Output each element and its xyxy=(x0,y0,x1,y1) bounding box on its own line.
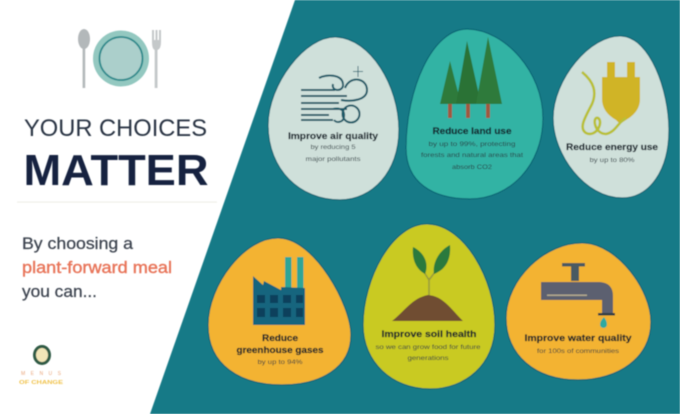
text: reduce land use: absorb CO2 xyxy=(452,165,493,171)
text: improve water quality xyxy=(524,333,632,355)
icon: wind xyxy=(301,66,367,122)
panel: greenhouse gases xyxy=(208,238,351,385)
text: reduce greenhouse gases: Reduce xyxy=(262,333,298,343)
text: improve soil health xyxy=(376,329,481,362)
intro text xyxy=(22,235,172,301)
panel: land use xyxy=(406,29,543,199)
text: improve water quality: for 100s of communities xyxy=(537,349,619,355)
panel: air quality xyxy=(268,37,399,200)
logo: MENUS xyxy=(21,371,62,377)
text: improve air quality: major pollutants xyxy=(306,157,360,163)
text: improve soil health: Improve soil health xyxy=(382,329,476,339)
text: reduce energy use: Reduce energy use xyxy=(566,142,658,152)
text: improve air quality xyxy=(288,131,378,163)
logo xyxy=(19,346,64,386)
teal background panel xyxy=(150,0,680,414)
intro text: plant-forward meal xyxy=(22,259,172,277)
text: reduce land use: by up to 99%, protecting xyxy=(428,142,516,148)
text: reduce greenhouse gases xyxy=(236,333,324,366)
logo: OF CHANGE xyxy=(19,380,64,386)
text: improve soil health: so we can grow food for future xyxy=(376,345,481,351)
text: improve water quality: Improve water quality xyxy=(524,333,632,343)
plate and cutlery icon xyxy=(78,29,161,88)
icon: plate xyxy=(93,30,149,86)
text: reduce land use: Reduce land use xyxy=(432,126,512,136)
intro text: By choosing a xyxy=(22,235,133,253)
icon: spoon xyxy=(78,29,90,88)
text: reduce energy use: by up to 80% xyxy=(590,158,635,164)
panel: soil health xyxy=(363,224,495,389)
text: reduce greenhouse gases: greenhouse gases xyxy=(236,345,324,355)
icon: faucet xyxy=(541,263,615,328)
text: reduce land use: forests and natural areas that xyxy=(421,153,523,159)
icon: plug xyxy=(582,62,640,134)
icon: trees xyxy=(440,37,502,118)
panel: water quality xyxy=(506,243,651,380)
text: improve soil health: generations xyxy=(408,356,448,362)
text: reduce land use xyxy=(421,126,523,171)
icon: factory xyxy=(253,257,305,325)
icon: fork xyxy=(152,30,161,88)
divider under heading xyxy=(17,202,217,203)
text: reduce energy use xyxy=(566,142,658,164)
heading: your choices: YOUR CHOICES xyxy=(24,115,207,142)
text: reduce greenhouse gases: by up to 94% xyxy=(258,360,303,366)
text: improve air quality: Improve air quality xyxy=(288,131,378,141)
panel: energy use xyxy=(553,36,669,198)
text: improve air quality: by reducing 5 xyxy=(310,145,356,151)
intro text: you can... xyxy=(22,283,97,301)
heading: matter: MATTER xyxy=(24,146,208,195)
icon: sprout in soil xyxy=(392,245,463,321)
